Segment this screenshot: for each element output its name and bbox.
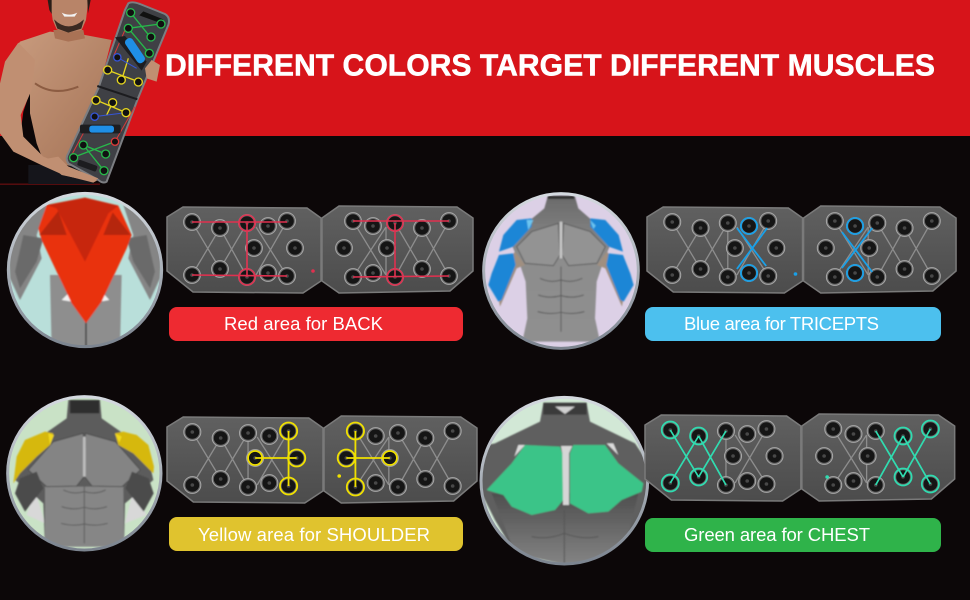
panel: back <box>8 193 473 348</box>
man holding board <box>0 0 169 185</box>
muscle diagram: shoulder <box>7 396 162 551</box>
muscle diagram: back <box>8 193 162 348</box>
muscle diagram: triceps <box>483 193 639 349</box>
label: shoulder: Yellow area for SHOULDER <box>198 524 430 545</box>
title: DIFFERENT COLORS TARGET DIFFERENT MUSCLES <box>165 48 935 82</box>
muscle diagram: chest <box>480 397 648 567</box>
header band <box>0 0 970 136</box>
label: chest <box>645 518 941 552</box>
label: shoulder <box>169 517 463 551</box>
panel: shoulder <box>7 396 477 551</box>
label: triceps <box>645 307 941 341</box>
label: chest: Green area for CHEST <box>684 524 870 545</box>
exercise board <box>67 2 169 183</box>
exercise board: shoulder <box>167 416 477 503</box>
exercise board: back <box>167 206 473 293</box>
exercise board: triceps <box>647 206 956 293</box>
label: back: Red area for BACK <box>224 313 384 334</box>
exercise board: chest <box>645 414 955 501</box>
label: triceps: Blue area for TRICEPTS <box>684 313 879 334</box>
label: back <box>169 307 463 341</box>
panel: chest <box>480 397 955 567</box>
panel: triceps <box>483 193 956 349</box>
